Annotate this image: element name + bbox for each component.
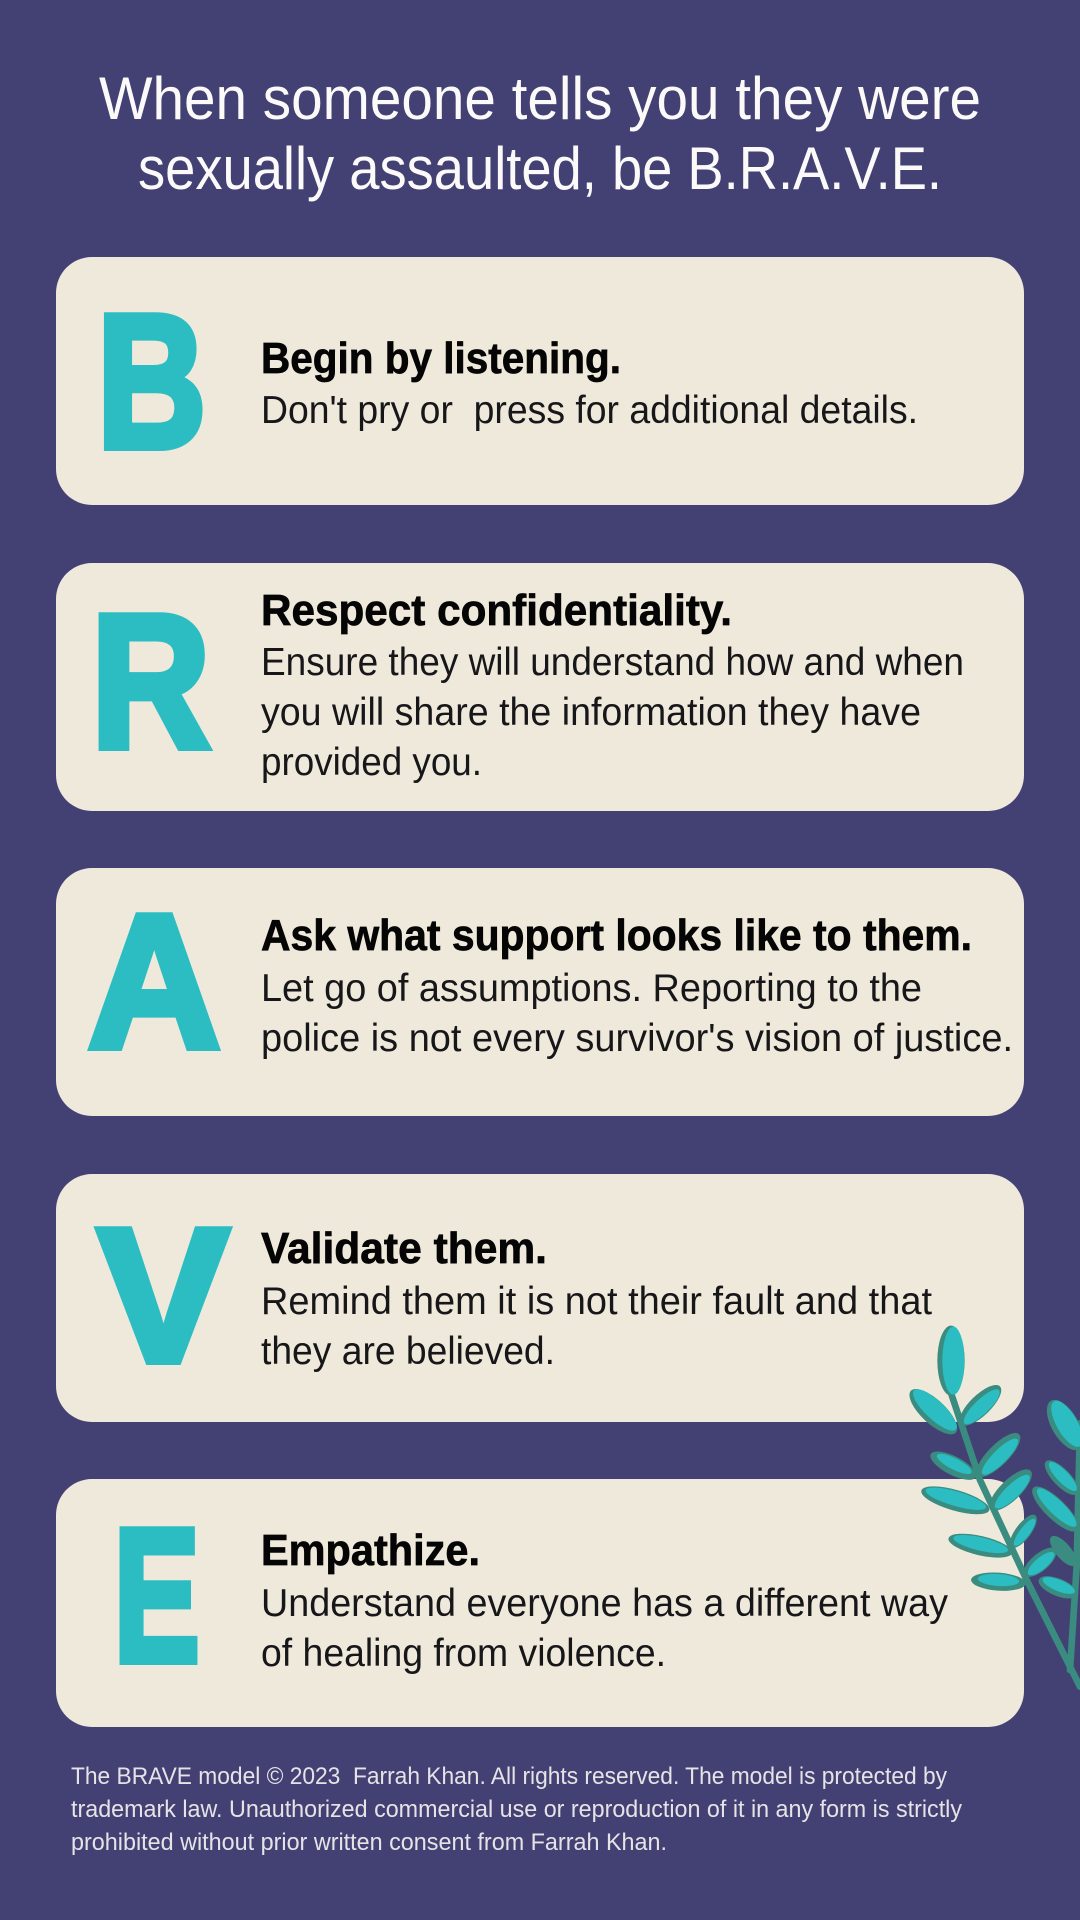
text: respect confidentiality: Respect confidentiality. [261,586,732,635]
panel: E [56,1479,1024,1727]
text: empathize [261,1526,948,1675]
text: validate them: Remind them it is not their fault and that [261,1280,932,1323]
letter V: V [98,1189,229,1401]
text: validate them: Validate them. [261,1224,547,1273]
panel: V [56,1174,1024,1422]
letter R: R [91,575,210,788]
panel: A [56,868,1024,1116]
text: ask what support looks like: Let go of assumptions. Reporting to the [261,967,922,1010]
text: validate them [261,1224,932,1373]
text: begin by listening: Don't pry or press for additional details. [261,389,918,432]
text: ask what support looks like: Ask what support looks like to them. [261,911,972,960]
copyright note: The BRAVE model © 2023 Farrah Khan. All rights reserved. The model is protected by [71,1763,947,1790]
text: respect confidentiality: you will share the information they have [261,691,921,734]
text: begin by listening [261,334,918,432]
text: respect confidentiality: Ensure they will understand how and when [261,641,964,684]
panel: R [56,563,1024,811]
text: ask what support looks like [261,911,1013,1060]
text: begin by listening: Begin by listening. [261,334,621,383]
icon: plant sprigs [903,1326,1080,1687]
title: sexually assaulted, be B.R.A.V.E. [138,135,942,202]
copyright note: prohibited without prior written consent from Farrah Khan. [71,1829,667,1856]
letter A: A [88,875,220,1088]
copyright note: trademark law. Unauthorized commercial use or reproduction of it in any form is strictly [71,1796,962,1823]
text: empathize: Empathize. [261,1526,480,1575]
letter B: B [97,277,206,488]
text: validate them: they are believed. [261,1330,555,1373]
text: ask what support looks like: police is not every survivor's vision of justice. [261,1017,1013,1060]
copyright note [71,1763,962,1856]
text: respect confidentiality [261,586,964,784]
title: When someone tells you they were [99,65,981,132]
text: respect confidentiality: provided you. [261,741,482,784]
text: empathize: of healing from violence. [261,1632,666,1675]
panel: B [56,257,1024,505]
letter E: E [114,1490,200,1702]
text: empathize: Understand everyone has a different way [261,1582,948,1625]
title [99,65,981,202]
